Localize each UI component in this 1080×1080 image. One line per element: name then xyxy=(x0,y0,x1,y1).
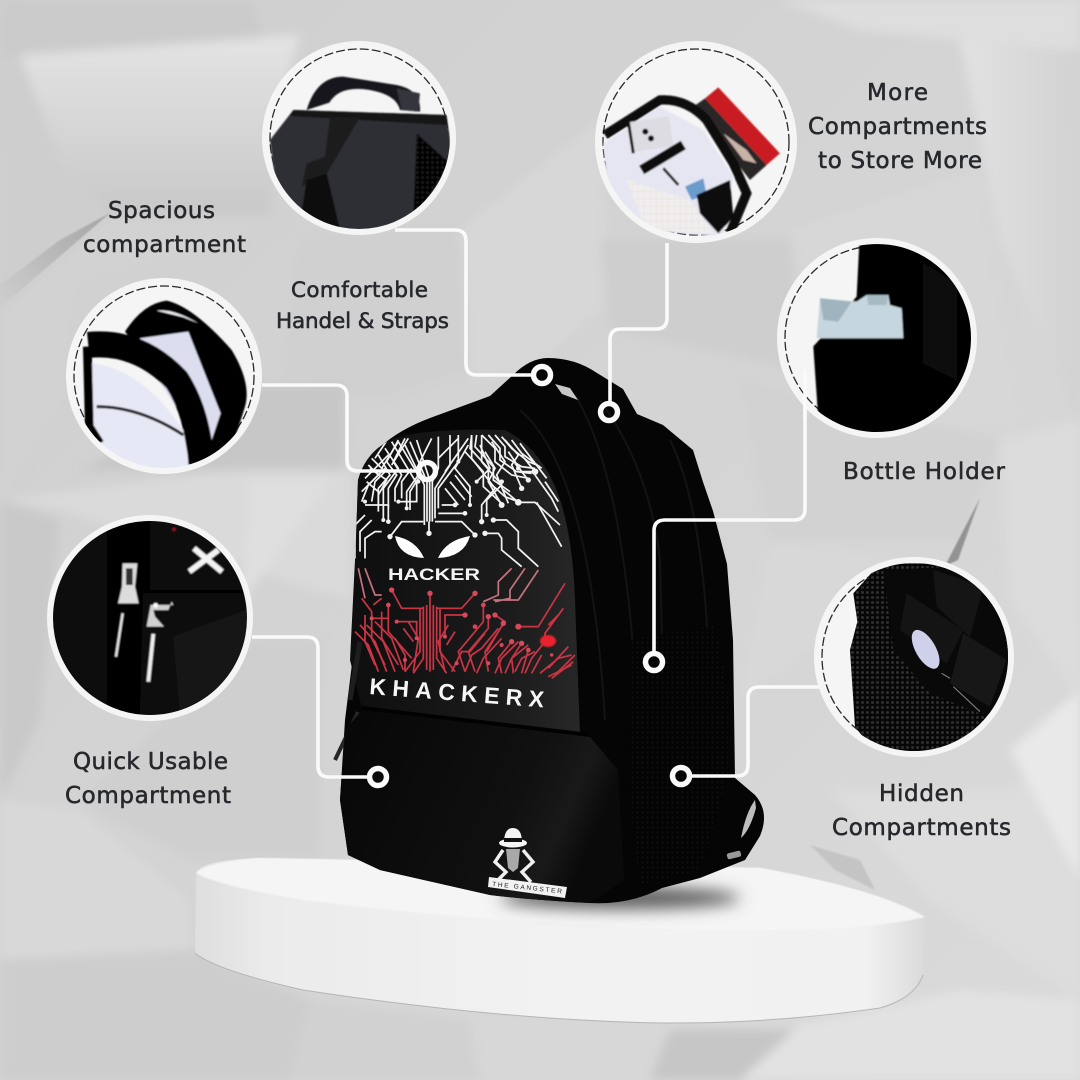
gangster logo: THE GANGSTER xyxy=(492,881,562,895)
gangster logo xyxy=(488,828,567,898)
connector: bottle xyxy=(654,370,805,653)
side pocket mesh xyxy=(628,625,730,885)
label: more compartments: to Store More xyxy=(818,148,982,174)
circle: zipper detail xyxy=(47,515,253,721)
front printed panel xyxy=(350,430,580,735)
label: spacious compartment: Spacious xyxy=(108,198,215,224)
connector: spacious xyxy=(262,385,418,471)
circle: handle detail xyxy=(262,41,456,243)
alien eyes logo xyxy=(395,536,470,558)
circle: spacious compartment xyxy=(66,278,262,477)
connector: handle xyxy=(395,230,532,375)
backpack xyxy=(335,358,764,903)
label: comfortable handle: Comfortable xyxy=(291,278,428,303)
bag shadow xyxy=(500,887,740,909)
circle: bottle holder xyxy=(777,238,983,443)
circle: hidden compartment xyxy=(814,557,1023,763)
connector: hidden xyxy=(691,687,819,776)
zipper line and pulls xyxy=(335,642,590,760)
label: bottle holder: Bottle Holder xyxy=(843,459,1006,485)
backpack body silhouette xyxy=(340,358,764,903)
label: more compartments: Compartments xyxy=(808,114,987,140)
label: spacious compartment: compartment xyxy=(83,232,246,258)
marker dots xyxy=(370,366,690,786)
KHACKERX print: KHACKERX xyxy=(369,673,546,712)
circle: more compartments xyxy=(595,41,797,243)
circuit print red xyxy=(355,583,575,678)
HACKER print: HACKER xyxy=(388,565,480,584)
label: comfortable handle: Handel & Straps xyxy=(276,309,449,334)
label: hidden compartments: Hidden xyxy=(879,781,964,807)
front pocket xyxy=(340,710,624,903)
label: quick usable: Compartment xyxy=(65,783,231,809)
platform pedestal xyxy=(195,858,925,1023)
label: more compartments: More xyxy=(867,80,928,106)
circuit print white xyxy=(355,435,575,678)
connector: compartments xyxy=(610,243,667,403)
connector: quick usable xyxy=(252,637,368,777)
gusset seams xyxy=(520,395,708,720)
label: hidden compartments: Compartments xyxy=(832,815,1011,841)
label: quick usable: Quick Usable xyxy=(73,749,228,775)
strap loop xyxy=(726,800,756,860)
top handle gap xyxy=(555,384,578,400)
bottle connector top xyxy=(803,370,807,420)
